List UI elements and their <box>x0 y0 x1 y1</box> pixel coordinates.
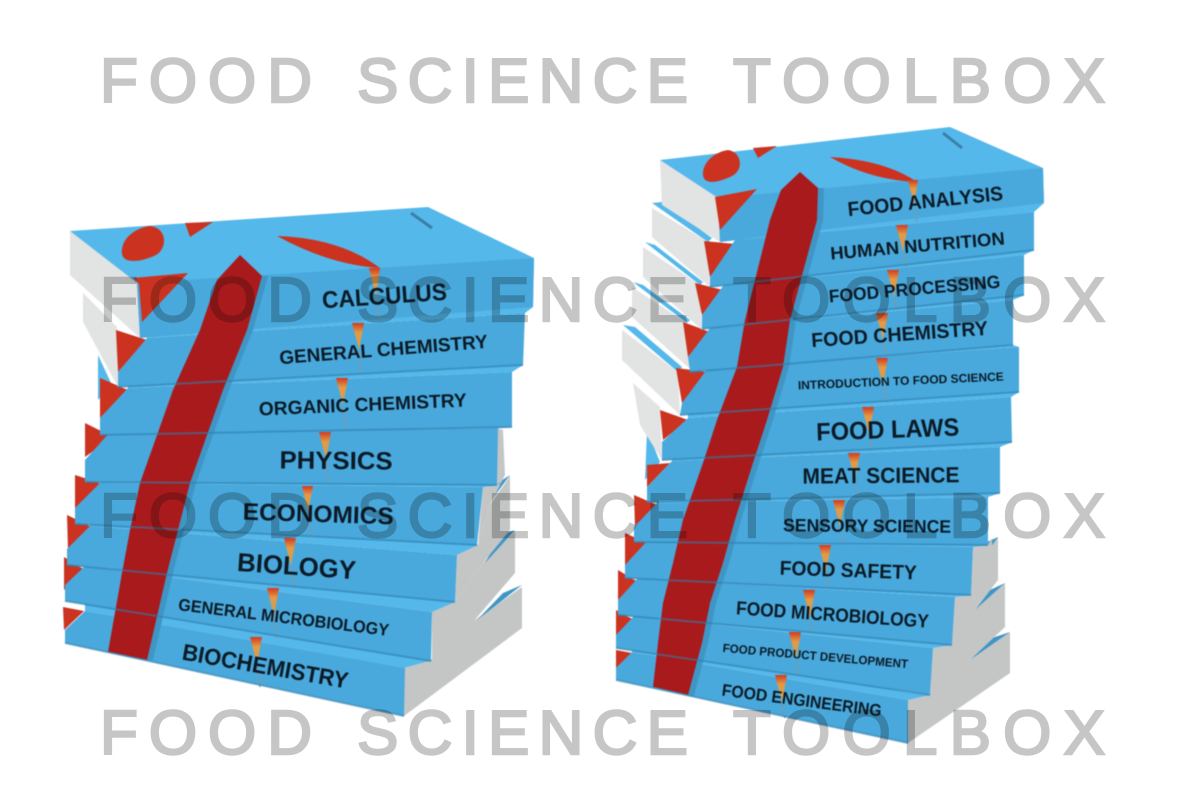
book: Introduction to Food Science: INTRODUCTION TO FOOD SCIENCE <box>798 370 1004 392</box>
book: Biochemistry: BIOCHEMISTRY <box>180 639 350 694</box>
book: Food Analysis (top) <box>660 127 1044 242</box>
book: Food Processing <box>643 242 1034 330</box>
book: Food Microbiology <box>618 537 998 645</box>
book: Biology: BIOLOGY <box>236 547 357 585</box>
book: Calculus (top): CALCULUS <box>321 279 448 314</box>
book: Economics: ECONOMICS <box>242 499 394 530</box>
book: Sensory Science <box>634 492 1000 545</box>
watermark: Food Science Toolbox, line 2: SCIENCE <box>357 266 688 335</box>
book: Food Engineering: FOOD ENGINEERING <box>721 681 883 720</box>
watermark: Food Science Toolbox, line 1: FOOD <box>100 47 312 116</box>
watermark: Food Science Toolbox, line 4: FOOD <box>100 699 312 768</box>
book: Biochemistry <box>63 585 522 716</box>
book: Food Laws: FOOD LAWS <box>816 414 960 446</box>
book: Calculus (top) <box>70 207 534 338</box>
book: Human Nutrition <box>652 202 1044 287</box>
book: Human Nutrition: HUMAN NUTRITION <box>829 228 1006 264</box>
ribbon: left stack red band <box>108 255 268 660</box>
watermark: Food Science Toolbox, line 2: TOOLBOX <box>733 266 1105 335</box>
book: Food Analysis (top): FOOD ANALYSIS <box>847 183 1004 221</box>
book: Organic Chemistry: ORGANIC CHEMISTRY <box>258 390 467 421</box>
book: Physics <box>85 423 512 485</box>
book: Sensory Science: SENSORY SCIENCE <box>783 515 951 537</box>
book: Economics <box>75 430 505 545</box>
book: Food Product Development <box>616 583 1005 695</box>
watermark: Food Science Toolbox, line 1 <box>100 47 1105 116</box>
watermark: Food Science Toolbox, line 4: TOOLBOX <box>733 699 1105 768</box>
watermark: Food Science Toolbox, line 2: FOOD <box>100 266 312 335</box>
ribbon: right stack red band <box>653 172 824 696</box>
book: General Chemistry: GENERAL CHEMISTRY <box>279 332 489 369</box>
watermark: Food Science Toolbox, line 1: TOOLBOX <box>733 47 1105 116</box>
book: Food Safety: FOOD SAFETY <box>779 558 918 584</box>
book: General Chemistry <box>83 293 533 387</box>
panel: left stack of books <box>63 207 534 716</box>
cover art: red petal <box>122 226 164 261</box>
book: Food Microbiology: FOOD MICROBIOLOGY <box>735 598 930 633</box>
book: General Microbiology: GENERAL MICROBIOLOGY <box>177 595 391 640</box>
book: Food Product Development: FOOD PRODUCT DEVELOPMENT <box>722 641 909 671</box>
watermark: Food Science Toolbox, line 4: SCIENCE <box>357 699 688 768</box>
book: Meat Science: MEAT SCIENCE <box>802 462 960 489</box>
book: Food Chemistry <box>632 282 1024 372</box>
book: Food Engineering <box>616 632 1010 743</box>
watermark: Food Science Toolbox, line 2 <box>100 266 1105 335</box>
book: Food Processing: FOOD PROCESSING <box>828 272 1001 306</box>
watermark: Food Science Toolbox, line 4 <box>100 699 1105 768</box>
book: Meat Science <box>645 430 1012 502</box>
watermark: Food Science Toolbox, line 3: TOOLBOX <box>733 482 1105 551</box>
book: Food Laws <box>633 383 1019 460</box>
book: Biology <box>67 475 510 602</box>
watermark: Food Science Toolbox, line 3: SCIENCE <box>357 482 688 551</box>
panel: right stack of books <box>616 127 1044 743</box>
watermark: Food Science Toolbox, line 1: SCIENCE <box>357 47 688 116</box>
book: Physics: PHYSICS <box>279 447 393 475</box>
book: Organic Chemistry <box>98 355 523 435</box>
cover art: red petal <box>703 150 740 182</box>
book: Introduction to Food Science <box>622 325 1019 415</box>
watermark: Food Science Toolbox, line 3 <box>100 482 1105 551</box>
book: Food Safety <box>625 533 992 595</box>
watermark: Food Science Toolbox, line 3: FOOD <box>100 482 312 551</box>
book: Food Chemistry: FOOD CHEMISTRY <box>811 318 989 352</box>
book: General Microbiology <box>64 530 515 661</box>
